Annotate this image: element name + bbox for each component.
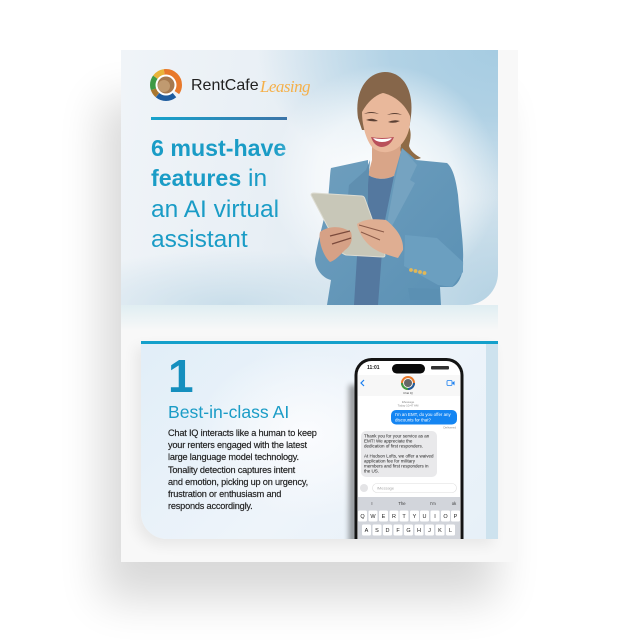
feature number: 1	[168, 350, 194, 402]
phone mockup with chat: discounts for that?	[395, 418, 431, 422]
logo script word: Leasing	[260, 77, 310, 96]
buttons	[409, 268, 426, 275]
header	[358, 375, 460, 396]
title: an AI virtual	[151, 196, 279, 222]
left hand	[320, 227, 352, 262]
title: 6 must-have	[151, 134, 286, 160]
phone mockup with chat: J	[428, 528, 431, 534]
phone mockup with chat: K	[438, 528, 442, 534]
phone mockup with chat: application fee for military	[364, 458, 416, 464]
phone mockup with chat: Today 10:47 AM	[398, 404, 419, 408]
hair	[357, 72, 411, 130]
status bar: 11:01	[367, 365, 380, 371]
phone mockup with chat: Thank you for your service as an	[364, 434, 430, 438]
sleeve cuff	[404, 235, 463, 287]
phone mockup with chat: the US.	[364, 468, 379, 474]
phone mockup with chat	[345, 358, 464, 539]
phone mockup with chat: A	[365, 528, 369, 534]
phone mockup with chat: Y	[413, 514, 417, 520]
feature description: Tonality detection captures intent	[168, 465, 295, 475]
illustration: woman holding tablet	[276, 72, 488, 305]
phone mockup with chat: L	[449, 528, 452, 534]
phone mockup with chat: G	[406, 528, 411, 534]
phone mockup with chat: ok	[452, 501, 457, 506]
shirt	[354, 175, 394, 305]
phone mockup with chat: W	[370, 514, 376, 520]
phone mockup with chat: I'm an EMT, do you offer any	[395, 412, 451, 417]
jacket body	[315, 148, 463, 305]
received bubble	[361, 431, 437, 477]
title: features in	[151, 165, 267, 192]
phone mockup with chat: P	[454, 514, 458, 520]
phone mockup with chat: H	[417, 528, 421, 534]
reflection glow under hero	[121, 305, 498, 331]
phone mockup with chat: EMT! We appreciate the	[364, 438, 413, 444]
phone mockup with chat: D	[386, 528, 390, 534]
phone mockup with chat: E	[382, 514, 386, 520]
timestamp: iMessage	[402, 400, 415, 404]
phone mockup with chat: T	[402, 514, 406, 520]
eyes and brows	[364, 112, 402, 123]
halo behind figure	[276, 74, 488, 248]
tablet	[311, 193, 385, 257]
phone mockup with chat: U	[423, 514, 427, 520]
panel: feature 1 card	[141, 341, 498, 539]
phone mockup with chat: Q	[360, 514, 365, 520]
phone mockup with chat: Delivered	[443, 426, 456, 430]
card right strip	[486, 344, 498, 539]
right hand	[357, 219, 403, 258]
divider rule	[151, 117, 287, 120]
feature description: and emotion, picking up on urgency,	[168, 477, 308, 487]
logo wordmark: RentCafe	[191, 77, 259, 94]
phone mockup with chat: I	[434, 514, 436, 520]
title	[151, 134, 286, 253]
drop shadow	[102, 100, 497, 600]
phone mockup with chat: The	[398, 501, 406, 506]
keyboard	[358, 497, 460, 539]
phone mockup with chat: O	[443, 514, 448, 520]
phone mockup with chat: members and first responders in	[364, 464, 429, 468]
face	[362, 93, 410, 152]
input row	[360, 484, 368, 492]
ponytail	[400, 128, 421, 160]
feature description: large language model technology.	[168, 452, 299, 462]
phone mockup with chat: At Hudson Lofts, we offer a waived	[364, 454, 434, 458]
phone mockup with chat: S	[375, 528, 379, 534]
phone mockup with chat: iMessage	[377, 486, 395, 490]
feature description: Chat IQ interacts like a human to keep	[168, 428, 317, 438]
phone mockup with chat: F	[396, 528, 400, 534]
neck	[368, 146, 401, 179]
pocket	[408, 288, 440, 300]
lapels	[348, 160, 370, 206]
feature description: frustration or enthusiasm and	[168, 489, 281, 499]
title: assistant	[151, 226, 248, 253]
phone mockup with chat: Chat IQ	[403, 391, 414, 395]
sent bubble	[391, 410, 457, 424]
phone mockup with chat: R	[392, 514, 396, 520]
phone mockup with chat: dedication of first responders.	[364, 444, 423, 448]
phone mockup with chat: I'm	[430, 501, 436, 506]
feature heading: Best-in-class AI	[168, 402, 289, 422]
page sheet	[121, 50, 518, 562]
hero panel background	[121, 50, 498, 305]
feature description: responds accordingly.	[168, 501, 252, 511]
phone mockup with chat: I	[371, 501, 373, 506]
feature description: your renters engaged with the latest	[168, 440, 307, 450]
smile	[371, 137, 394, 147]
feature description	[168, 428, 317, 512]
